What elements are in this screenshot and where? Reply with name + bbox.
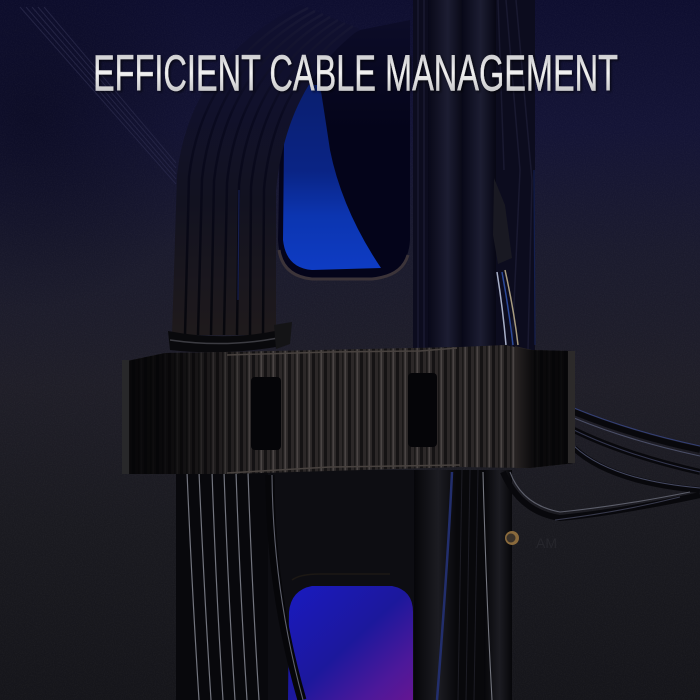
right vertical cable group — [413, 0, 535, 350]
lower right vertical cables — [414, 470, 512, 700]
diagonal cable in front of window — [270, 475, 302, 700]
upper window with blue light — [278, 20, 410, 279]
thin diagonal cables top left — [20, 7, 176, 184]
cable tie — [168, 322, 292, 352]
left cable bundle arching over the window — [172, 5, 360, 335]
clamp bottom edge — [227, 465, 460, 473]
striped wires — [497, 270, 518, 345]
clamp body — [122, 345, 575, 474]
screw — [505, 531, 519, 545]
lower window with blue and purple light — [268, 470, 416, 700]
ribbed cable clamp — [122, 345, 575, 474]
highlight on bundle edge — [238, 190, 239, 300]
lower left ribbon cable — [176, 472, 268, 700]
clamp top edge — [227, 348, 457, 355]
right clamp slot — [408, 373, 437, 447]
left clamp slot — [251, 377, 281, 450]
clamp right lip — [568, 351, 575, 463]
cable knot — [493, 178, 512, 264]
clamp left lip — [122, 360, 129, 474]
embossed AM mark: AM — [536, 535, 557, 551]
cables fanning out to the right — [503, 408, 700, 520]
